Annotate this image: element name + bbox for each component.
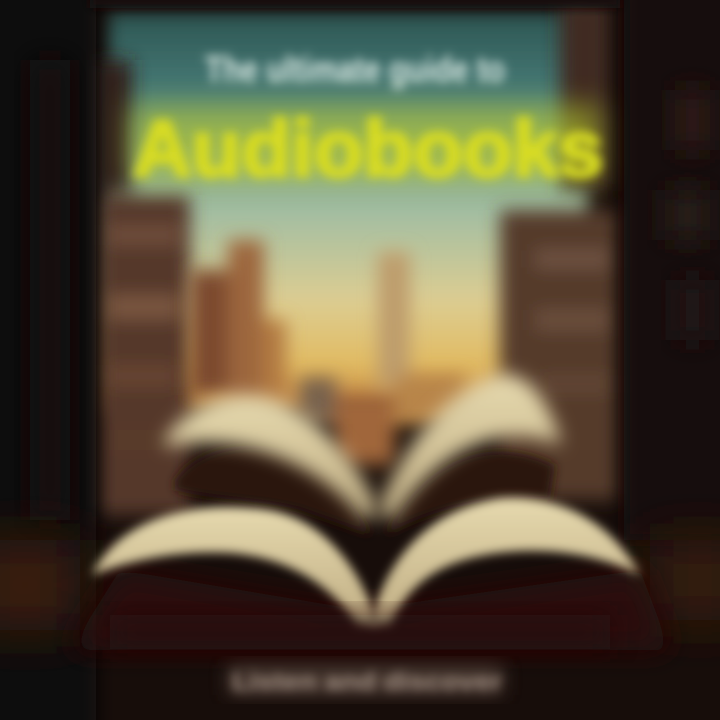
panel: right dark bookshelf xyxy=(624,0,720,540)
panel: city buildings xyxy=(190,240,465,465)
title glow xyxy=(130,105,600,180)
panel: left brown bookshelf xyxy=(92,60,190,515)
caption glow xyxy=(228,665,503,695)
heading: The ultimate guide to xyxy=(205,49,505,90)
upper left page xyxy=(165,395,378,522)
lower left page xyxy=(92,507,378,625)
book shadow xyxy=(110,615,610,649)
panel: sky xyxy=(108,12,588,412)
caption text: Listen and discover xyxy=(232,668,502,696)
title xyxy=(130,104,603,193)
panel: floor glow xyxy=(0,540,720,630)
lower right page xyxy=(370,498,640,625)
panel: top edge shade xyxy=(90,0,620,8)
panel: left dark bookshelf xyxy=(0,0,96,720)
title text: Audiobooks xyxy=(133,104,603,193)
upper right page xyxy=(378,374,562,522)
caption xyxy=(228,665,503,696)
icon: open book xyxy=(70,374,670,650)
panel: right brown bookshelf xyxy=(500,0,618,500)
book dark body xyxy=(70,570,670,650)
upper right shadow xyxy=(385,451,555,535)
upper left shadow xyxy=(175,446,372,535)
